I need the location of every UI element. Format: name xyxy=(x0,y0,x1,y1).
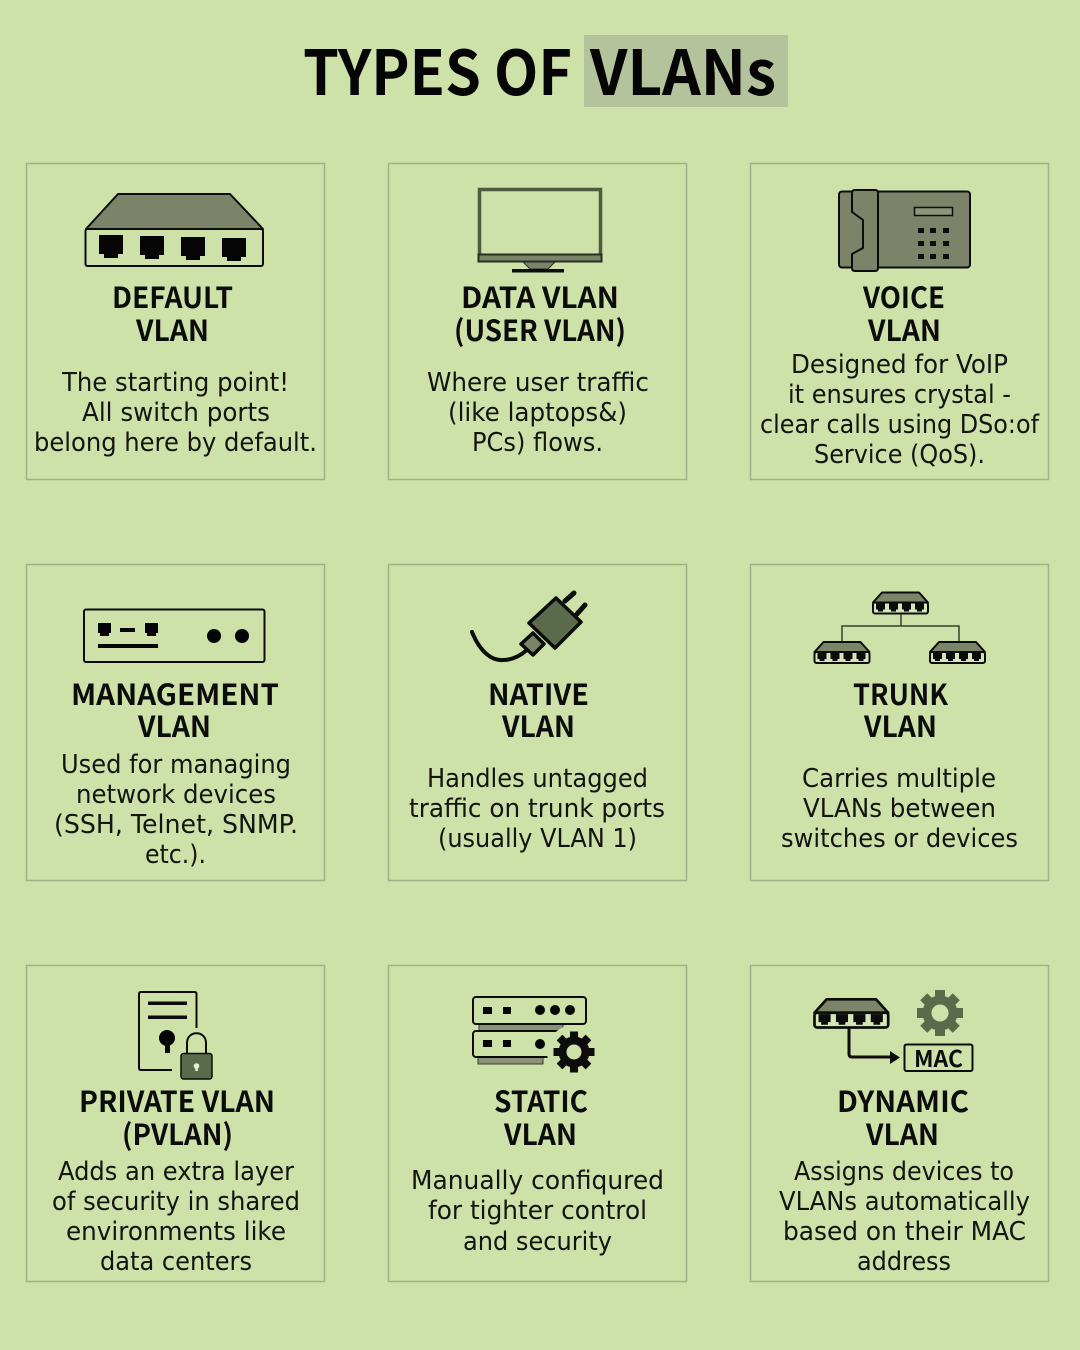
description: environments like xyxy=(66,1217,286,1247)
description: address xyxy=(857,1247,951,1277)
description: Handles untagged xyxy=(427,764,648,794)
description: Adds an extra layer xyxy=(58,1157,294,1187)
description: (usually VLAN 1) xyxy=(438,824,637,854)
description: The starting point! xyxy=(61,368,289,398)
heading xyxy=(862,275,945,350)
panel: private VLAN xyxy=(26,966,324,1282)
description: Service (QoS). xyxy=(814,440,985,470)
description xyxy=(411,1166,664,1257)
heading: VLAN xyxy=(135,308,209,350)
heading: MANAGEMENT xyxy=(71,672,279,714)
heading: VLAN xyxy=(863,704,937,746)
icon: management device xyxy=(84,610,264,662)
description: (like laptops&) xyxy=(448,398,627,428)
description: Carries multiple xyxy=(802,764,996,794)
description: belong here by default. xyxy=(34,428,317,458)
heading: (USER VLAN) xyxy=(454,308,626,350)
description: Where user traffic xyxy=(427,368,649,398)
description: of security in shared xyxy=(52,1187,300,1217)
description xyxy=(779,1157,1030,1277)
description: switches or devices xyxy=(781,824,1018,854)
description xyxy=(760,350,1040,470)
icon: servers with gear xyxy=(473,997,601,1079)
description: Designed for VoIP xyxy=(791,350,1008,380)
heading: DYNAMIC xyxy=(837,1079,969,1121)
description xyxy=(52,1157,300,1277)
heading: VLAN xyxy=(137,704,211,746)
description: PCs) flows. xyxy=(472,428,603,458)
panel: voice VLAN xyxy=(750,164,1048,480)
title: VLANs xyxy=(589,23,776,113)
heading: (PVLAN) xyxy=(122,1112,233,1154)
heading: PRIVATE VLAN xyxy=(79,1079,275,1121)
icon: desk phone xyxy=(839,190,970,271)
description: for tighter control xyxy=(428,1196,647,1226)
description: VLANs between xyxy=(803,794,996,824)
icon: trunk topology xyxy=(814,592,985,663)
heading xyxy=(488,672,589,746)
panel: data VLAN xyxy=(388,164,686,480)
icon: switch, gear and MAC: MAC xyxy=(914,1040,963,1074)
heading: VLAN xyxy=(865,1112,939,1154)
description xyxy=(781,764,1018,854)
icon: document with lock xyxy=(139,992,212,1079)
description: traffic on trunk ports xyxy=(409,794,665,824)
panel: default VLAN xyxy=(26,164,324,480)
description: clear calls using DSo:of xyxy=(760,410,1040,440)
heading xyxy=(494,1079,588,1154)
description xyxy=(427,368,649,458)
panel: native VLAN xyxy=(388,564,686,880)
description: VLANs automatically xyxy=(779,1187,1030,1217)
description: (SSH, Telnet, SNMP. xyxy=(54,810,298,840)
title xyxy=(303,23,788,113)
icon: power plug xyxy=(472,593,585,660)
heading: VOICE xyxy=(862,275,945,317)
heading: TRUNK xyxy=(853,672,948,714)
description: and security xyxy=(463,1227,612,1257)
heading: VLAN xyxy=(501,704,575,746)
heading xyxy=(112,275,233,350)
heading xyxy=(454,275,626,350)
icon: monitor xyxy=(478,190,602,272)
heading xyxy=(853,672,948,746)
heading: STATIC xyxy=(494,1079,588,1121)
panel: static VLAN xyxy=(388,966,686,1282)
heading: VLAN xyxy=(503,1112,577,1154)
heading: NATIVE xyxy=(488,672,589,714)
icon: gear xyxy=(554,1032,594,1072)
description: Manually confiqured xyxy=(411,1166,664,1196)
icon: network switch xyxy=(86,194,263,266)
heading xyxy=(837,1079,969,1154)
icon: switch, gear and MAC xyxy=(814,990,972,1074)
description: All switch ports xyxy=(82,398,270,428)
description xyxy=(34,368,317,458)
description: Assigns devices to xyxy=(794,1157,1014,1187)
panel: dynamic VLAN xyxy=(750,966,1048,1282)
description: data centers xyxy=(100,1247,252,1277)
heading: DEFAULT xyxy=(112,275,233,317)
panel: trunk VLAN xyxy=(750,564,1048,880)
heading xyxy=(79,1079,275,1154)
description: Used for managing xyxy=(61,750,291,780)
panel: management VLAN xyxy=(26,564,324,880)
heading: VLAN xyxy=(867,308,941,350)
title: TYPES OF xyxy=(303,23,572,113)
description xyxy=(54,750,298,870)
description: etc.). xyxy=(145,840,206,870)
description: network devices xyxy=(76,780,276,810)
description: it ensures crystal - xyxy=(788,380,1011,410)
heading xyxy=(71,672,279,746)
heading: DATA VLAN xyxy=(461,275,619,317)
description xyxy=(409,764,665,854)
description: based on their MAC xyxy=(783,1217,1026,1247)
